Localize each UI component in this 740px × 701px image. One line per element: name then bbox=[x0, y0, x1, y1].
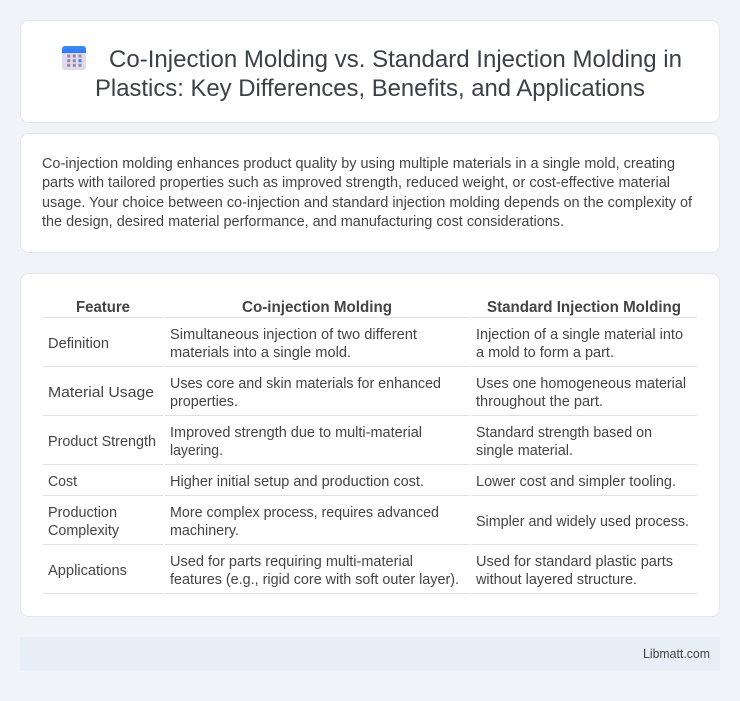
footer: Libmatt.com bbox=[643, 647, 710, 661]
row: production complexity: Complexity bbox=[48, 523, 120, 539]
table header: Co-injection Molding bbox=[242, 299, 392, 316]
row: production complexity: Simpler and widely used process. bbox=[476, 514, 689, 530]
title bbox=[95, 46, 682, 102]
row: production complexity: machinery. bbox=[170, 523, 239, 539]
row: definition: Injection of a single material into bbox=[476, 327, 683, 343]
row: definition: Simultaneous injection of two different bbox=[170, 327, 417, 343]
panel: comparison table bbox=[20, 274, 720, 616]
row: production complexity: More complex process, requires advanced bbox=[170, 505, 439, 521]
table header bbox=[76, 299, 681, 316]
row: definition bbox=[48, 327, 683, 361]
row: material usage: properties. bbox=[170, 394, 238, 410]
row: product strength: layering. bbox=[170, 443, 223, 459]
row: material usage: Uses one homogeneous material bbox=[476, 376, 686, 392]
row: product strength: Standard strength based on bbox=[476, 425, 652, 441]
row: definition: materials into a single mold. bbox=[170, 345, 351, 361]
row: material usage: Material Usage bbox=[48, 385, 154, 401]
footer bbox=[20, 637, 720, 671]
row: definition: a mold to form a part. bbox=[476, 345, 614, 361]
panel: summary text: the design, desired material performance, and manufacturing cost considerations. bbox=[42, 214, 564, 230]
row: material usage bbox=[48, 376, 686, 410]
row: material usage: Uses core and skin materials for enhanced bbox=[170, 376, 441, 392]
row: cost: Higher initial setup and production cost. bbox=[170, 474, 424, 490]
table header: Feature bbox=[76, 299, 130, 316]
panel: summary text bbox=[20, 134, 720, 252]
icon: calendar bbox=[62, 46, 86, 70]
row: applications: features (e.g., rigid core with soft outer layer). bbox=[170, 572, 459, 588]
row: product strength: Improved strength due to multi-material bbox=[170, 425, 422, 441]
row: material usage: throughout the part. bbox=[476, 394, 603, 410]
row: applications: without layered structure. bbox=[475, 572, 637, 588]
row: production complexity: Production bbox=[48, 505, 117, 521]
row: applications: Used for parts requiring multi-material bbox=[170, 554, 413, 570]
row: cost: Cost bbox=[48, 474, 77, 490]
row: applications: Applications bbox=[48, 563, 127, 579]
row: applications: Used for standard plastic parts bbox=[476, 554, 673, 570]
panel: summary text: usage. Your choice between co-injection and standard injection molding depends on the complexity of bbox=[42, 195, 693, 211]
row: product strength: single material. bbox=[476, 443, 573, 459]
row: product strength: Product Strength bbox=[48, 434, 156, 450]
panel: summary text: parts with tailored properties such as improved strength, reduced weight, or cost-effective material bbox=[42, 175, 670, 191]
title: Co-Injection Molding vs. Standard Injection Molding in bbox=[109, 46, 682, 73]
row: definition: Definition bbox=[48, 336, 109, 352]
title: Plastics: Key Differences, Benefits, and Applications bbox=[95, 75, 645, 102]
row: applications bbox=[48, 554, 673, 588]
row: product strength bbox=[48, 425, 652, 459]
row: production complexity bbox=[48, 505, 689, 539]
row: cost bbox=[48, 474, 676, 490]
panel: title card bbox=[20, 20, 720, 122]
panel: summary text: Co-injection molding enhances product quality by using multiple materials in a single mold, creating bbox=[42, 156, 675, 172]
table header: Standard Injection Molding bbox=[487, 299, 681, 316]
row: cost: Lower cost and simpler tooling. bbox=[476, 474, 676, 490]
